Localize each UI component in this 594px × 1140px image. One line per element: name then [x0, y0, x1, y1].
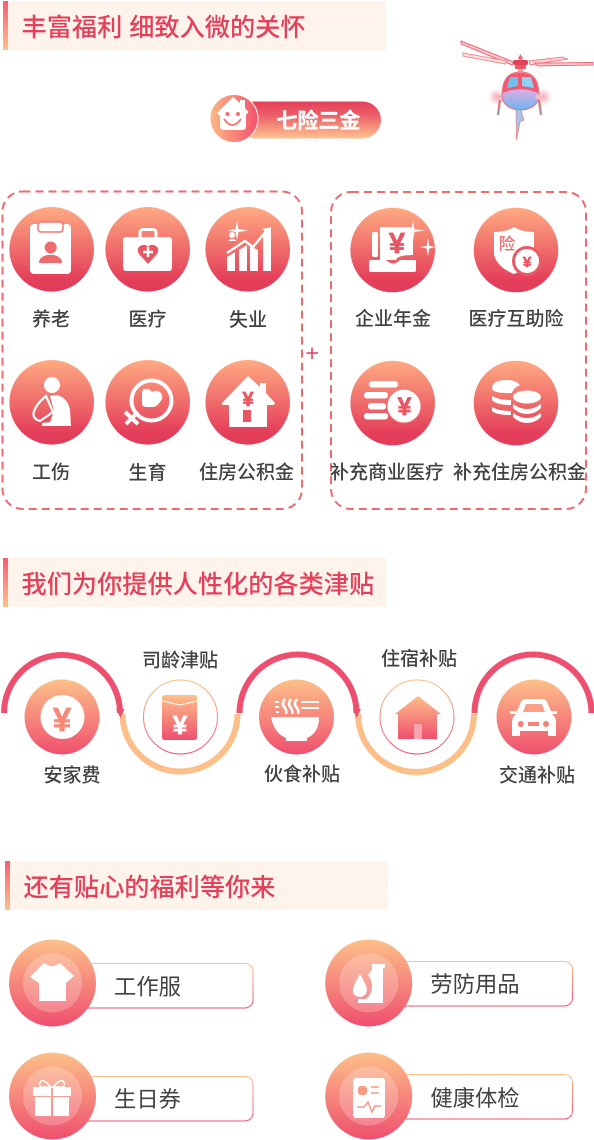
icon: helicopter — [461, 41, 593, 140]
item: 住房公积金: 住房公积金 — [199, 462, 294, 484]
item: 司龄津贴: ¥ — [173, 710, 188, 740]
item: 司龄津贴 — [142, 650, 218, 754]
chart: wave arcs — [4, 655, 592, 772]
item: 企业年金 — [350, 208, 436, 330]
heading: 丰富福利: 丰富福利 细致入微的关怀 — [22, 14, 306, 42]
item: 补充住房公积金 — [453, 361, 586, 484]
item: 住房公积金: ¥ — [242, 389, 254, 411]
item: 补充商业医疗 — [330, 361, 444, 484]
item: 生日券: 生日券 — [114, 1087, 181, 1112]
heading: 津贴 — [3, 558, 386, 607]
item: 住宿补贴 — [380, 648, 457, 754]
item: 医疗互助险: ¥ — [523, 254, 532, 271]
item: 养老: 养老 — [32, 308, 70, 330]
plus sign — [306, 348, 318, 359]
item: 医疗互助险: 险 — [499, 234, 516, 254]
item: 住宿补贴: 住宿补贴 — [381, 648, 457, 670]
item: 生日券 — [9, 1052, 253, 1140]
item: 企业年金: ¥ — [389, 228, 405, 260]
item: 司龄津贴: 司龄津贴 — [142, 650, 218, 672]
item: 医疗互助险: 医疗互助险 — [468, 308, 564, 330]
item: 交通补贴: 交通补贴 — [499, 764, 575, 786]
item: 劳防用品: 劳防用品 — [430, 972, 520, 997]
item: 补充住房公积金: 补充住房公积金 — [453, 462, 586, 484]
item: 健康体检: 健康体检 — [430, 1086, 520, 1111]
item: 补充商业医疗: ¥ — [398, 393, 412, 421]
panel: 七险 dashed box — [2, 192, 302, 509]
item: 失业 — [205, 207, 290, 331]
item: 工伤: 工伤 — [32, 462, 70, 484]
badge: 七险三金 — [210, 94, 381, 142]
item: 养老 — [9, 207, 94, 330]
panel: 三金 dashed box — [330, 192, 586, 509]
heading: 津贴: 我们为你提供人性化的各类津贴 — [22, 571, 374, 599]
item: 住房公积金 — [199, 360, 294, 484]
item: 医疗 — [105, 207, 190, 330]
item: 健康体检 — [325, 1052, 572, 1140]
item: 工作服: 工作服 — [114, 974, 181, 1000]
item: 生育 — [105, 360, 190, 484]
item: 安家费 — [24, 680, 101, 786]
item: 伙食补贴 — [259, 680, 340, 786]
item: 工伤 — [9, 360, 94, 484]
item: 医疗: 医疗 — [128, 308, 167, 330]
item: 生育: 生育 — [128, 462, 167, 484]
badge: 七险三金: 七险三金 — [276, 109, 360, 133]
item: 失业: 失业 — [229, 309, 267, 331]
heading: 丰富福利 — [3, 1, 386, 50]
heading: 贴心福利 — [5, 861, 388, 910]
item: 工作服 — [9, 940, 253, 1026]
item: 交通补贴 — [496, 680, 575, 786]
item: 伙食补贴: 伙食补贴 — [264, 764, 340, 786]
item: 安家费: 安家费 — [43, 764, 101, 786]
item: 安家费: ¥ — [53, 701, 72, 738]
item: 劳防用品 — [325, 940, 572, 1026]
item: 医疗互助险 — [468, 208, 564, 330]
item: 补充商业医疗: 补充商业医疗 — [330, 462, 444, 484]
item: 企业年金: 企业年金 — [355, 308, 431, 330]
heading: 贴心福利: 还有贴心的福利等你来 — [24, 874, 275, 902]
icon: smiling house — [217, 97, 248, 130]
